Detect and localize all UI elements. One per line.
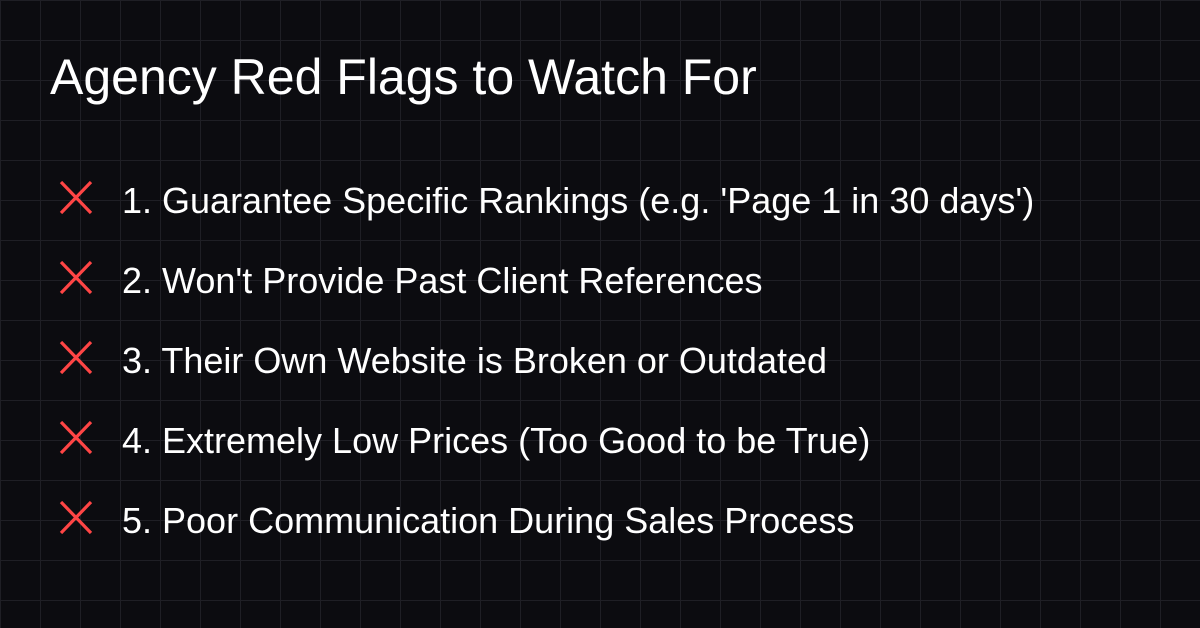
- icon: red x: [60, 181, 92, 214]
- item 2: [60, 260, 763, 301]
- item 5: [60, 500, 854, 541]
- icon: red x: [60, 341, 92, 374]
- text 4: 4. Extremely Low Prices (Too Good to be True): [122, 420, 870, 461]
- item 1: [60, 180, 1034, 221]
- icon: red x: [60, 501, 92, 534]
- item 4: [60, 420, 870, 461]
- text 2: 2. Won't Provide Past Client References: [122, 260, 763, 301]
- item 3: [60, 340, 827, 381]
- text 1: 1. Guarantee Specific Rankings (e.g. 'Page 1 in 30 days'): [122, 180, 1034, 221]
- text 5: 5. Poor Communication During Sales Process: [122, 500, 854, 541]
- icon: red x: [60, 421, 92, 454]
- icon: red x: [60, 261, 92, 294]
- title: Agency Red Flags to Watch For: [50, 49, 757, 105]
- text 3: 3. Their Own Website is Broken or Outdated: [122, 340, 827, 381]
